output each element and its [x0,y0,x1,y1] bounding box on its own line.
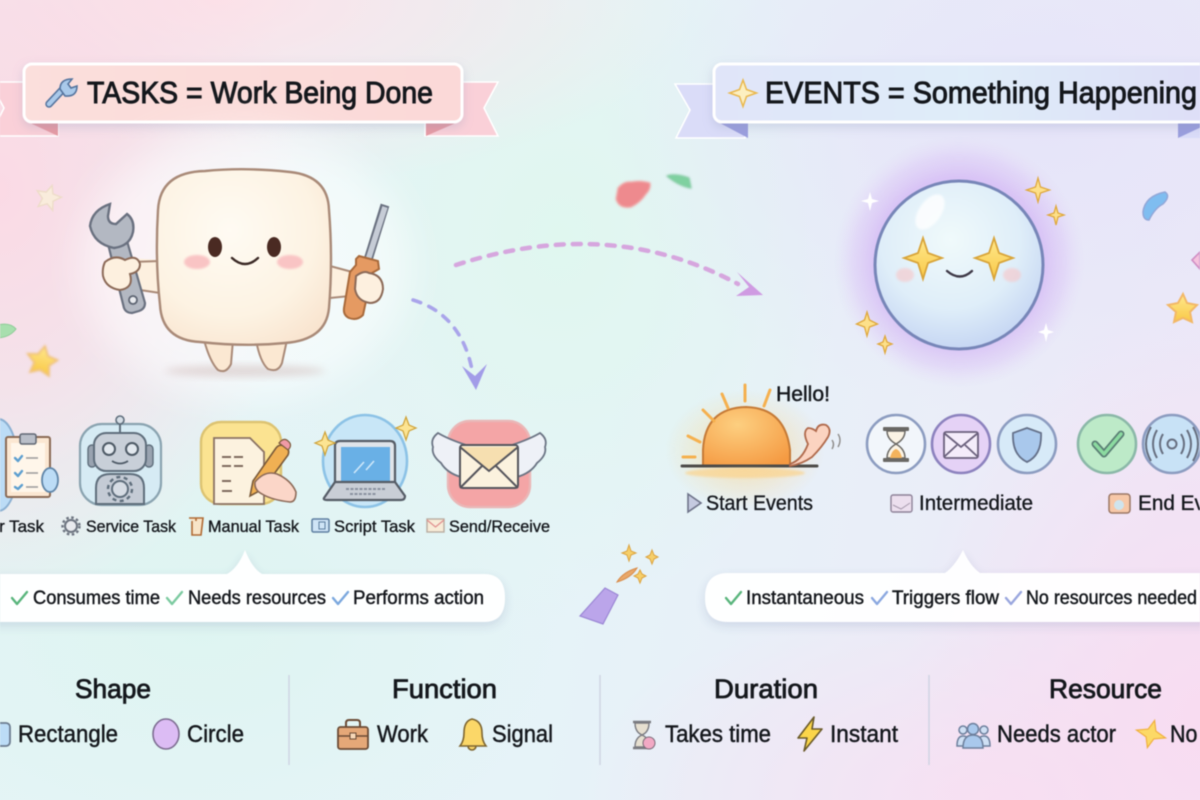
comparison: resource: Resource [1049,674,1162,704]
character: marshmallow task mascot [80,130,410,400]
feet [204,340,233,371]
party popper [580,545,658,624]
comparison: function: Signal [492,721,553,748]
wrench [90,204,145,313]
task labels: Send/Receive [449,517,550,536]
comparison: duration: Instant [830,721,898,748]
end event icons [1078,415,1200,473]
task labels: Script Task [334,517,415,536]
event category labels: Intermediate [919,492,1033,515]
task icon row [0,415,546,511]
icon: mail circle [932,415,990,473]
callout: task traits: Performs action [353,588,484,609]
bubble smile [947,271,972,276]
icon: hourglass circle [867,415,925,473]
screwdriver [344,205,385,319]
comparison: function [338,674,553,750]
bubble cheeks [896,268,914,282]
ribbon tails: tasks [0,82,498,136]
white halo [80,130,410,400]
icon: signal circle [1143,415,1200,473]
callout: task traits: Needs resources [188,588,326,609]
event bubble mascot [834,137,1084,387]
callout bubble: tasks [0,550,505,622]
comparison: duration [633,674,898,751]
icon: note [189,518,203,535]
icon: service robot [80,416,161,505]
star eyes [904,238,942,279]
icon: sparkle [730,80,756,106]
comparison: function: Function [392,674,497,704]
callout: event traits: Instantaneous [746,588,864,609]
bubble [875,181,1043,349]
sunrise start event icon: Hello! [776,383,830,406]
callout bubble: events [705,550,1200,622]
comparison dividers [289,675,929,765]
icon: winged envelope [432,421,546,507]
face [184,237,303,269]
icon: people [957,724,990,748]
callout: event traits: Triggers flow [892,588,999,609]
icon: check circle [1078,415,1136,473]
callout: task traits: Consumes time [33,588,160,609]
comparison: resource [957,674,1200,751]
task labels [0,517,550,536]
icon: hourglass [633,722,655,749]
title: tasks: TASKS = Work Being Done [87,75,433,110]
gold sparkles [856,178,1064,353]
ground shadow [165,365,325,377]
icon: intermediate envelope [891,495,912,512]
comparison: duration: Takes time [665,721,771,748]
event category labels: Start Events [706,492,813,515]
icon: user task [0,419,58,511]
sunrise start event icon [665,383,840,510]
icon: bell [460,719,486,750]
icon: script laptop [315,415,416,507]
icon: end event badge [1109,494,1130,513]
icon: gear [62,518,80,534]
icon: play triangle [688,494,701,512]
banner plate: tasks [24,64,462,122]
comparison: function: Work [377,721,429,748]
icon: rectangle swatch [0,723,10,746]
arms [126,258,162,293]
icon: screen [312,519,329,532]
bubble glow [834,137,1084,387]
body [157,169,331,345]
comparison: shape: Shape [75,674,151,704]
task labels: Service Task [86,517,176,536]
comparison: duration: Duration [714,674,818,704]
intermediate event icons [867,415,1056,473]
task labels: Manual Task [208,517,299,536]
banner plate: events [714,64,1200,122]
icon: shield circle [998,415,1056,473]
callout: task traits [0,550,505,622]
icon: wrench [49,79,77,104]
arrow: dashed to events [456,244,763,296]
icon: small envelope [427,519,444,532]
hand: left [103,257,140,290]
icon: lightning [798,717,822,751]
hand: right [355,272,383,303]
event category labels [688,492,1200,515]
comparison: shape [0,674,244,749]
icon: manual paper and pencil [201,422,296,504]
confetti decorations [0,175,1200,377]
icon: sparkle burst [1133,717,1169,751]
callout: event traits [705,550,1200,622]
comparison: shape: Rectangle [18,721,118,748]
arrow: dashed down [413,300,487,390]
icon: briefcase [338,720,368,749]
ribbon tails: events [675,84,1200,138]
comparison: shape: Circle [187,721,244,748]
icon: circle swatch [153,719,179,749]
banner: tasks [0,64,498,136]
comparison: resource: Needs actor [997,721,1116,748]
banner: events [675,64,1200,138]
